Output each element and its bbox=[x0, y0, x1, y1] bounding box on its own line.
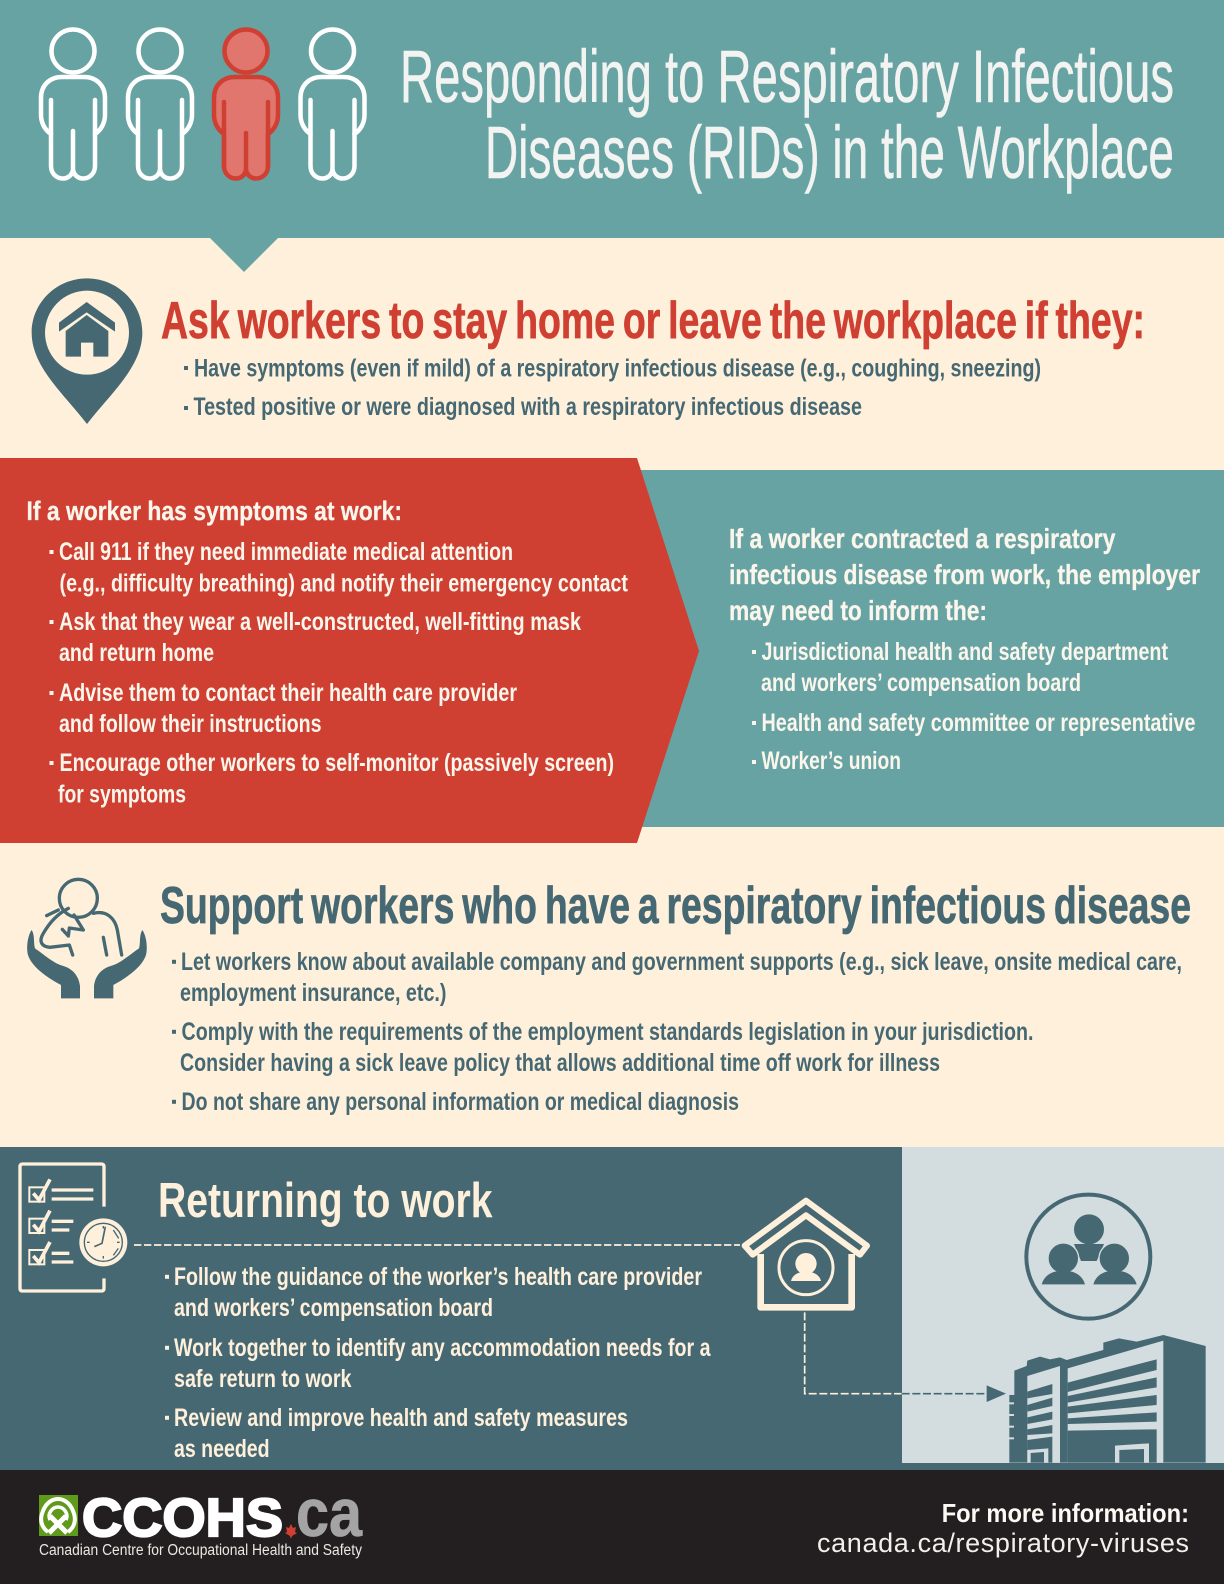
list: symptom actions: Ask that they wear a well-constructed, well-fitting mask bbox=[59, 608, 581, 636]
list: symptom actions: for symptoms bbox=[58, 780, 186, 808]
list: support actions bbox=[172, 948, 1182, 1116]
logo: CCOHS bbox=[39, 1475, 363, 1559]
list: stay home criteria: Tested positive or were diagnosed with a respiratory infectious disease bbox=[194, 393, 862, 421]
list: return actions: Review and improve health and safety measures bbox=[174, 1404, 628, 1432]
list: symptom actions: Advise them to contact their health care provider bbox=[59, 679, 517, 707]
heading: if a worker contracted: If a worker contracted a respiratory bbox=[729, 523, 1116, 554]
text: more information link: canada.ca/respiratory-viruses bbox=[817, 1528, 1189, 1558]
list: symptom actions: Call 911 if they need immediate medical attention bbox=[59, 538, 513, 566]
panel: header bbox=[0, 0, 1224, 272]
panel: support workers bbox=[27, 877, 1191, 1116]
list: return actions: as needed bbox=[174, 1435, 270, 1463]
title bbox=[400, 35, 1174, 194]
text: more information link: For more information: bbox=[942, 1498, 1189, 1528]
icon: four people, one infected bbox=[41, 30, 364, 178]
icon: group of workers in circle bbox=[1026, 1195, 1150, 1319]
panel: returning to work bbox=[0, 1147, 1224, 1470]
list: return actions bbox=[165, 1263, 711, 1463]
list: support actions: Consider having a sick leave policy that allows additional time off work for illness bbox=[180, 1049, 940, 1077]
heading: symptoms at work: If a worker has symptoms at work: bbox=[26, 496, 402, 526]
heading: returning to work: Returning to work bbox=[158, 1174, 493, 1228]
arrow: dashed route home to workplace bbox=[134, 1245, 1006, 1402]
logo: CCOHS: ca bbox=[296, 1475, 363, 1551]
list: return actions: and workers’ compensation board bbox=[174, 1294, 493, 1322]
logo: CCOHS: Canadian Centre for Occupational Health and Safety bbox=[39, 1542, 362, 1559]
heading: if a worker contracted bbox=[729, 523, 1200, 626]
icon: sick person in caring hands bbox=[27, 879, 147, 998]
heading: if a worker contracted: may need to inform the: bbox=[729, 595, 987, 626]
panel: stay home bbox=[32, 278, 1145, 424]
list: return actions: Follow the guidance of the worker’s health care provider bbox=[174, 1263, 702, 1291]
list: who to inform: Worker’s union bbox=[762, 747, 901, 775]
list: stay home criteria bbox=[184, 354, 1041, 421]
icon: workplace building bbox=[1009, 1335, 1206, 1463]
list: who to inform: and workers’ compensation board bbox=[761, 669, 1081, 697]
list: return actions: Work together to identify any accommodation needs for a bbox=[174, 1334, 711, 1362]
list: symptom actions: (e.g., difficulty breathing) and notify their emergency contact bbox=[60, 570, 629, 598]
icon: location pin with house bbox=[32, 278, 142, 424]
panel: teal employer notification bbox=[620, 470, 1224, 827]
list: symptom actions: Encourage other workers to self-monitor (passively screen) bbox=[60, 749, 614, 777]
list: symptom actions: and return home bbox=[59, 639, 214, 667]
panel: red symptoms at work bbox=[0, 458, 699, 843]
logo: CCOHS: CCOHS bbox=[82, 1488, 283, 1548]
list: return actions: safe return to work bbox=[174, 1365, 352, 1393]
list: symptom actions bbox=[50, 538, 629, 808]
list: support actions: Do not share any personal information or medical diagnosis bbox=[182, 1088, 739, 1116]
icon: home with person bbox=[745, 1201, 867, 1307]
panel: footer bbox=[0, 1470, 1224, 1584]
list: symptom actions: and follow their instructions bbox=[59, 710, 322, 738]
list: support actions: employment insurance, etc.) bbox=[180, 979, 446, 1007]
icon: checklist and clock bbox=[20, 1164, 127, 1291]
text: more information link bbox=[817, 1498, 1189, 1558]
list: who to inform bbox=[752, 638, 1196, 775]
